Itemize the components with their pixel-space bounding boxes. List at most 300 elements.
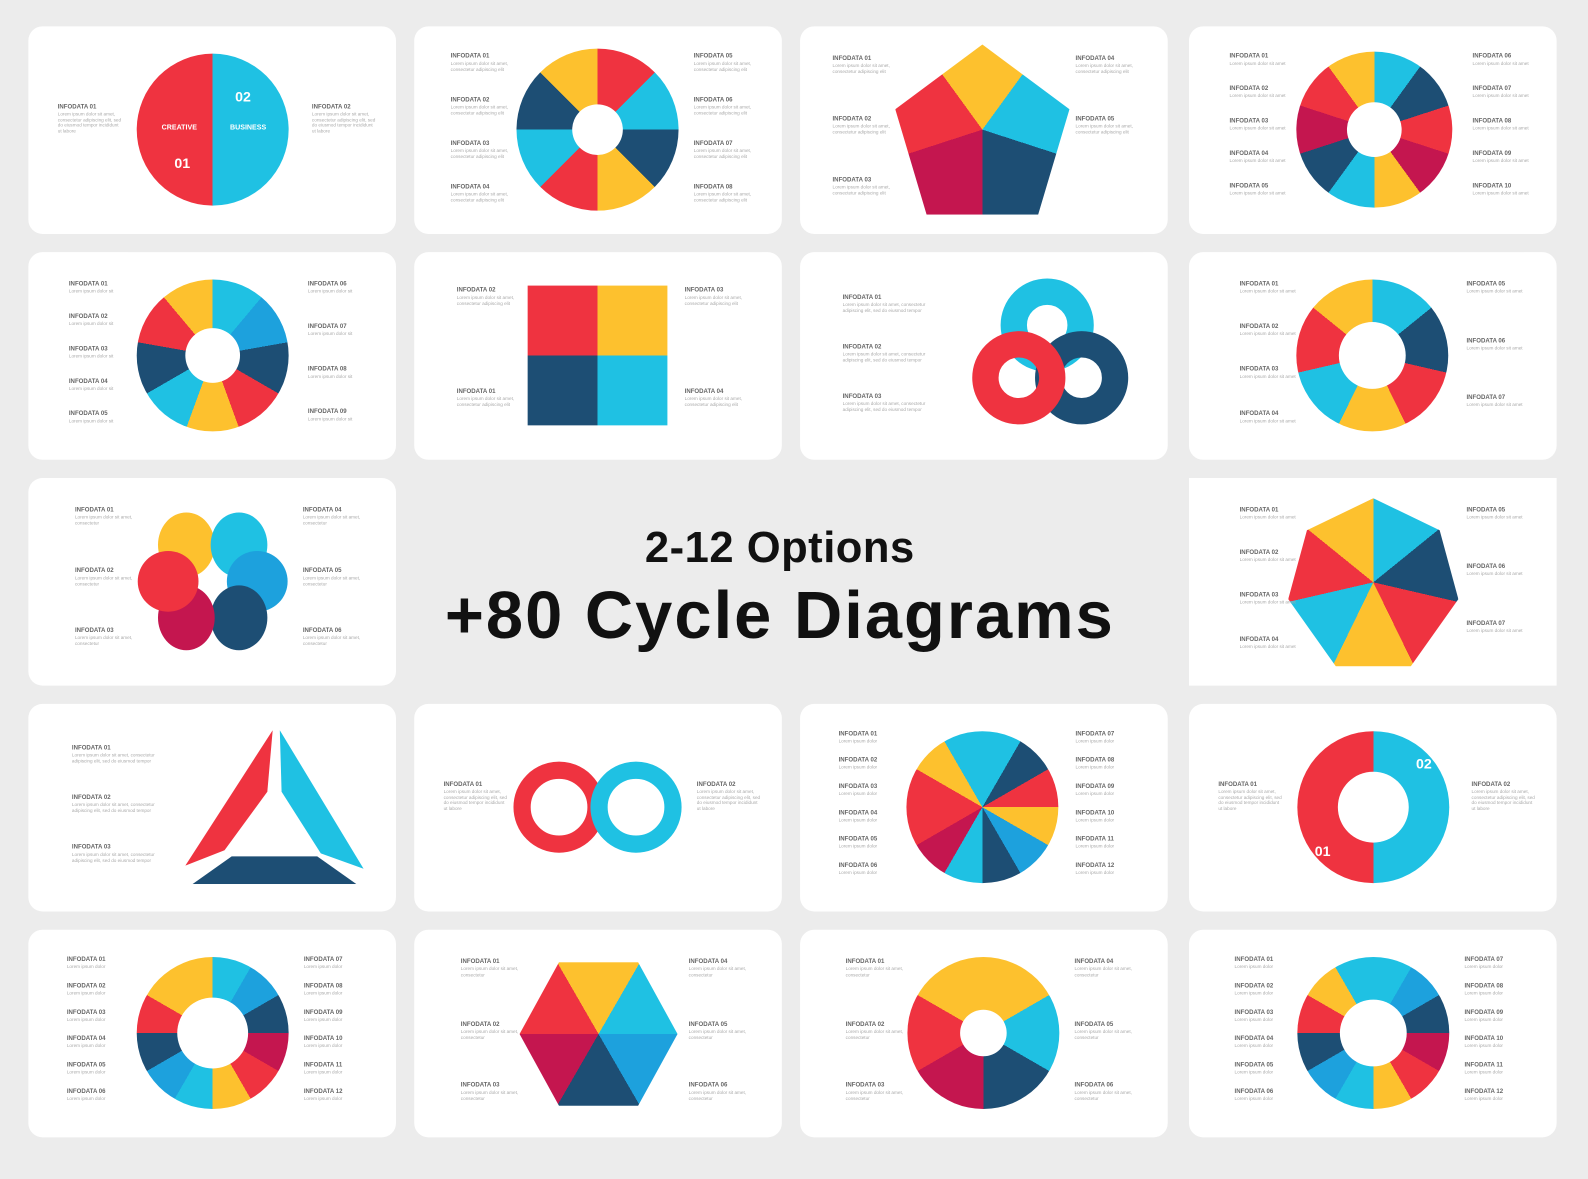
text: left labels: Lorem ipsum dolor sit xyxy=(69,386,113,391)
text: left labels xyxy=(450,53,508,202)
diagram: three rings xyxy=(972,278,1128,424)
text: labels: Lorem ipsum dolor sit amet, consectetur adipiscing elit, sed do eiusmod tempor xyxy=(72,802,155,813)
text: right labels: INFODATA 06 xyxy=(308,282,347,288)
text: right labels: INFODATA 07 xyxy=(1076,731,1114,737)
text: left labels: INFODATA 04 xyxy=(1229,151,1268,157)
diagram: 12 swirl xyxy=(906,731,1058,883)
text: left labels: Lorem ipsum dolor sit amet, consectetur xyxy=(846,1029,903,1040)
text: left labels: Lorem ipsum dolor sit amet xyxy=(1240,331,1296,336)
text: labels: Lorem ipsum dolor sit amet, consectetur adipiscing elit, sed do eiusmod tempor xyxy=(72,752,155,763)
text: left labels: INFODATA 05 xyxy=(1235,1062,1273,1068)
text: left labels: INFODATA 04 xyxy=(451,184,489,190)
text: right labels: Lorem ipsum dolor xyxy=(1464,990,1503,996)
text: right labels: Lorem ipsum dolor sit amet, consectetur xyxy=(303,635,360,646)
text: right labels xyxy=(1464,956,1503,1101)
text: left labels: INFODATA 06 xyxy=(67,1089,106,1095)
text: right labels: INFODATA 12 xyxy=(304,1089,343,1095)
text: right labels: INFODATA 06 xyxy=(303,628,342,634)
text: right labels: Lorem ipsum dolor sit xyxy=(308,289,352,294)
text: right labels: INFODATA 06 xyxy=(694,97,732,103)
text: labels: Lorem ipsum dolor sit amet, consectetur adipiscing elit, sed do eiusmod tempor xyxy=(843,351,925,362)
text: left labels: INFODATA 02 xyxy=(846,1022,884,1028)
text: labels: INFODATA 01 xyxy=(843,295,881,301)
text: right labels: INFODATA 04 xyxy=(303,507,342,513)
text: left labels: INFODATA 01 xyxy=(69,282,108,288)
text: right labels: Lorem ipsum dolor sit amet, consectetur xyxy=(689,1090,746,1100)
card 14: 2-step ring xyxy=(1189,704,1557,911)
text: left labels: INFODATA 04 xyxy=(67,1036,106,1042)
text: right labels: INFODATA 04 xyxy=(685,389,723,395)
text: left labels: Lorem ipsum dolor sit amet, consectetur adipiscing elit xyxy=(457,396,514,407)
text: labels: INFODATA 03 xyxy=(843,394,881,400)
text: right labels xyxy=(1472,53,1529,196)
text: left labels: Lorem ipsum dolor sit amet xyxy=(1229,190,1286,195)
diagram: infinity rings xyxy=(513,762,682,853)
text: right labels: INFODATA 08 xyxy=(694,184,732,190)
text: left labels: Lorem ipsum dolor xyxy=(839,844,877,849)
text: left labels: INFODATA 03 xyxy=(1240,592,1278,599)
text: right labels: INFODATA 07 xyxy=(304,957,343,963)
text: right labels: INFODATA 05 xyxy=(303,568,342,574)
text: right labels: Lorem ipsum dolor sit amet xyxy=(1473,61,1529,66)
text: left labels: Lorem ipsum dolor sit amet xyxy=(1240,418,1296,423)
diagram: swirl xyxy=(907,957,1059,1109)
text: right labels: Lorem ipsum dolor xyxy=(1076,765,1114,770)
text: right labels: Lorem ipsum dolor xyxy=(1464,1069,1503,1075)
text: right labels xyxy=(684,287,742,407)
text: right labels: Lorem ipsum dolor xyxy=(304,1017,342,1022)
text: labels: INFODATA 02 xyxy=(72,795,111,801)
text: left labels: INFODATA 01 xyxy=(1229,54,1268,60)
text: right labels: Lorem ipsum dolor sit amet, consectetur adipiscing elit xyxy=(694,61,751,71)
text: left labels: INFODATA 01 xyxy=(1240,282,1278,288)
text: right labels: Lorem ipsum dolor sit amet xyxy=(1466,571,1523,576)
text: right labels: INFODATA 05 xyxy=(1466,282,1505,288)
text: left labels: INFODATA 01 xyxy=(846,959,884,965)
text: left labels: Lorem ipsum dolor sit amet xyxy=(1240,374,1296,379)
text: right labels: Lorem ipsum dolor xyxy=(304,990,342,996)
text: left labels: INFODATA 01 xyxy=(1235,957,1273,963)
text: left labels xyxy=(839,731,878,875)
text: infodata 02: Lorem ipsum dolor sit amet, consectetur adipiscing elit, sed do eiusmod tempor incididunt ut labore xyxy=(1472,789,1535,811)
card 7: 3 rings xyxy=(800,252,1168,460)
text: right labels: Lorem ipsum dolor sit amet xyxy=(1466,628,1523,633)
card 15: 12 segments ring xyxy=(28,930,396,1137)
text: left labels: INFODATA 03 xyxy=(1235,1010,1273,1016)
text: left labels xyxy=(1234,956,1274,1101)
text: right labels: Lorem ipsum dolor sit amet xyxy=(1473,190,1529,195)
text: right labels: Lorem ipsum dolor sit amet, consectetur xyxy=(689,966,746,977)
diagram: puzzle circle: 01 xyxy=(174,155,190,171)
text: left labels: INFODATA 02 xyxy=(1229,86,1268,92)
text: labels: INFODATA 02 xyxy=(843,344,881,350)
text: left labels xyxy=(1229,53,1286,196)
text: left labels: Lorem ipsum dolor sit xyxy=(69,321,113,326)
text: right labels: INFODATA 12 xyxy=(1076,863,1114,869)
text: right labels: INFODATA 08 xyxy=(308,367,347,373)
text: infodata 02: INFODATA 02 xyxy=(312,104,351,110)
text: left labels: Lorem ipsum dolor sit amet, consectetur xyxy=(461,1029,518,1040)
text: left labels: INFODATA 04 xyxy=(69,379,108,385)
text: left labels: INFODATA 03 xyxy=(461,1083,500,1089)
text: left labels: INFODATA 04 xyxy=(839,810,877,816)
text: left labels: INFODATA 03 xyxy=(67,1010,106,1016)
text: left labels xyxy=(69,281,114,424)
text: right labels: Lorem ipsum dolor sit xyxy=(308,374,352,379)
text: left labels: INFODATA 04 xyxy=(1240,637,1278,643)
card 16: hexagon xyxy=(414,930,782,1137)
text: left labels: INFODATA 02 xyxy=(69,314,108,320)
card 12: infinity xyxy=(414,704,782,911)
card 4: 10 segments xyxy=(1189,26,1557,234)
text: left labels xyxy=(1240,281,1296,424)
text: left labels: INFODATA 02 xyxy=(1240,324,1278,330)
text: right labels: Lorem ipsum dolor sit amet xyxy=(1466,345,1523,350)
text: left labels: INFODATA 01 xyxy=(457,389,495,395)
text: right labels: Lorem ipsum dolor sit amet, consectetur xyxy=(1075,1090,1132,1100)
text: left labels: Lorem ipsum dolor xyxy=(839,870,877,875)
text: labels xyxy=(72,745,155,863)
diagram: puzzle circle: BUSINESS xyxy=(230,125,266,132)
text: right labels: INFODATA 10 xyxy=(1076,810,1114,816)
text: left labels: Lorem ipsum dolor xyxy=(839,791,877,796)
text: left labels: Lorem ipsum dolor sit amet, consectetur adipiscing elit xyxy=(451,148,508,159)
text: right labels: INFODATA 09 xyxy=(304,1010,343,1016)
diagram: 12 segment ring xyxy=(137,957,289,1109)
text: right labels: INFODATA 07 xyxy=(1466,395,1505,401)
diagram: hexagon xyxy=(520,962,678,1106)
text: infodata 02: INFODATA 02 xyxy=(1472,782,1510,788)
text: left labels: Lorem ipsum dolor xyxy=(839,765,877,770)
text: left labels: INFODATA 01 xyxy=(67,957,106,963)
text: labels xyxy=(842,294,926,412)
text: left labels: Lorem ipsum dolor sit amet, consectetur adipiscing elit xyxy=(451,191,508,202)
text: right labels: Lorem ipsum dolor xyxy=(1076,844,1114,849)
title block xyxy=(445,524,1115,652)
text: left labels: Lorem ipsum dolor sit amet xyxy=(1240,600,1296,605)
text: right labels: INFODATA 09 xyxy=(308,409,347,415)
text: right labels: INFODATA 06 xyxy=(1466,338,1505,344)
text: left labels: Lorem ipsum dolor sit amet xyxy=(1240,289,1296,294)
text: right labels xyxy=(1466,281,1523,407)
card 18: 12 segment ring xyxy=(1189,930,1557,1137)
text: right labels: INFODATA 08 xyxy=(1464,983,1503,989)
text: right labels: Lorem ipsum dolor sit amet xyxy=(1473,158,1529,163)
text: infodata 01: INFODATA 01 xyxy=(58,104,96,110)
text: left labels: INFODATA 01 xyxy=(461,959,500,965)
text: right labels: INFODATA 04 xyxy=(1076,56,1114,62)
text: left labels: INFODATA 02 xyxy=(1240,550,1278,556)
text: left labels: Lorem ipsum dolor sit amet, consectetur adipiscing elit xyxy=(832,184,890,195)
text: right labels xyxy=(1076,731,1114,875)
text: right labels: INFODATA 03 xyxy=(685,288,723,294)
text: right labels: Lorem ipsum dolor sit xyxy=(308,416,352,421)
diagram: flower petals xyxy=(138,512,288,650)
text: right labels xyxy=(1074,958,1132,1100)
text: right labels: INFODATA 06 xyxy=(1466,564,1505,570)
diagram: square pinwheel xyxy=(528,286,667,425)
text: right labels: INFODATA 05 xyxy=(1466,507,1505,513)
text: left labels: INFODATA 01 xyxy=(1240,507,1278,513)
text: left labels: Lorem ipsum dolor xyxy=(67,964,105,969)
text: infodata 01: Lorem ipsum dolor sit amet, consectetur adipiscing elit, sed do eiusmod tempor incididunt ut labore xyxy=(1218,789,1282,811)
text: right labels: INFODATA 11 xyxy=(304,1062,342,1068)
text: right labels: Lorem ipsum dolor sit amet, consectetur adipiscing elit xyxy=(685,396,742,407)
text: right labels: INFODATA 08 xyxy=(304,983,343,989)
text: right labels xyxy=(1076,56,1133,134)
text: left labels: INFODATA 06 xyxy=(1235,1089,1273,1095)
card 11: triangle xyxy=(28,704,396,911)
diagram: ring xyxy=(1297,731,1449,883)
text: right labels: Lorem ipsum dolor sit xyxy=(308,331,352,336)
text: labels: INFODATA 01 xyxy=(72,745,111,751)
subtitle: 2-12 Options xyxy=(645,524,915,572)
text: infodata 02: Lorem ipsum dolor sit amet, consectetur adipiscing elit, sed do eiusmod tempor incididunt ut labore xyxy=(697,789,760,811)
card 10: heptagon xyxy=(1189,478,1557,686)
card 2: 8-swirl xyxy=(414,26,782,234)
text: right labels: Lorem ipsum dolor sit amet, consectetur xyxy=(689,1029,746,1040)
diagram: puzzle circle: 02 xyxy=(235,88,251,104)
text: right labels: Lorem ipsum dolor sit amet xyxy=(1473,126,1529,131)
text: left labels: Lorem ipsum dolor xyxy=(1235,1017,1273,1022)
text: left labels: INFODATA 04 xyxy=(1235,1036,1273,1042)
text: right labels: INFODATA 07 xyxy=(1466,621,1505,627)
text: left labels: Lorem ipsum dolor sit amet xyxy=(1229,61,1286,66)
text: left labels: Lorem ipsum dolor xyxy=(1235,1096,1273,1101)
text: right labels: Lorem ipsum dolor xyxy=(1464,1043,1503,1048)
card 1: 2-step puzzle xyxy=(28,26,396,234)
text: left labels: Lorem ipsum dolor xyxy=(1235,1069,1273,1075)
text: left labels: INFODATA 02 xyxy=(67,983,106,989)
text: left labels: INFODATA 03 xyxy=(832,177,871,183)
diagram: triangle xyxy=(186,730,364,884)
card 5: 9 segments xyxy=(28,252,396,460)
text: right labels: INFODATA 10 xyxy=(1473,183,1511,189)
text: left labels: Lorem ipsum dolor sit amet xyxy=(1229,158,1286,163)
text: right labels: INFODATA 05 xyxy=(689,1022,727,1028)
text: left labels: Lorem ipsum dolor sit xyxy=(69,418,113,423)
text: right labels: Lorem ipsum dolor sit amet, consectetur xyxy=(1075,966,1132,977)
diagram: puzzle circle xyxy=(137,54,289,206)
text: left labels xyxy=(1240,507,1296,649)
text: left labels xyxy=(461,958,518,1100)
text: right labels: Lorem ipsum dolor sit amet, consectetur adipiscing elit xyxy=(694,191,751,202)
text: right labels: INFODATA 07 xyxy=(694,141,732,147)
text: right labels: INFODATA 04 xyxy=(1075,959,1113,965)
text: left labels: INFODATA 03 xyxy=(75,628,114,634)
text: left labels: Lorem ipsum dolor xyxy=(1235,990,1273,996)
text: left labels: INFODATA 05 xyxy=(67,1062,106,1068)
text: right labels: INFODATA 05 xyxy=(1076,116,1114,123)
text: left labels: INFODATA 02 xyxy=(1235,983,1273,989)
text: right labels: INFODATA 04 xyxy=(689,959,727,965)
text: left labels xyxy=(75,507,132,646)
text: right labels: Lorem ipsum dolor xyxy=(1076,738,1114,743)
text: right labels: Lorem ipsum dolor sit amet xyxy=(1466,514,1523,520)
card 9: flower xyxy=(28,478,396,686)
diagram: pentagon xyxy=(895,45,1069,215)
text: left labels: INFODATA 06 xyxy=(839,863,877,869)
text: right labels: INFODATA 10 xyxy=(304,1036,343,1042)
text: right labels: Lorem ipsum dolor sit amet, consectetur xyxy=(1075,1029,1132,1040)
text: left labels: INFODATA 02 xyxy=(461,1022,500,1028)
text: right labels: Lorem ipsum dolor sit amet xyxy=(1466,289,1523,294)
text: left labels: Lorem ipsum dolor sit amet, consectetur xyxy=(846,966,903,977)
text: infodata 01: Lorem ipsum dolor sit amet, consectetur adipiscing elit, sed do eiusmod tempor incididunt ut labore xyxy=(444,789,507,811)
text: left labels: Lorem ipsum dolor xyxy=(67,1096,105,1101)
text: left labels: Lorem ipsum dolor sit amet xyxy=(1240,644,1296,649)
text: left labels: Lorem ipsum dolor xyxy=(839,817,877,822)
text: infodata 01: INFODATA 01 xyxy=(1218,782,1257,788)
text: infodata 02: INFODATA 02 xyxy=(697,782,736,788)
text: infodata 01: INFODATA 01 xyxy=(444,782,482,788)
text: left labels: Lorem ipsum dolor sit amet, consectetur xyxy=(461,1090,518,1100)
text: right labels xyxy=(688,958,746,1100)
text: left labels xyxy=(67,956,106,1101)
text: left labels: INFODATA 02 xyxy=(839,758,877,764)
text: left labels xyxy=(832,56,890,196)
text: right labels: INFODATA 06 xyxy=(1473,54,1511,60)
text: right labels: Lorem ipsum dolor xyxy=(304,1096,342,1101)
text: right labels: Lorem ipsum dolor sit amet xyxy=(1473,93,1529,98)
diagram: heptagon xyxy=(1288,498,1458,666)
diagram: ring: 02 xyxy=(1416,756,1432,772)
text: right labels: Lorem ipsum dolor sit amet, consectetur adipiscing elit xyxy=(694,104,751,115)
text: left labels: INFODATA 03 xyxy=(1240,367,1278,373)
text: right labels xyxy=(308,281,352,422)
text: right labels xyxy=(1466,507,1523,633)
card 6: square xyxy=(414,252,782,460)
text: right labels: Lorem ipsum dolor xyxy=(1076,817,1114,822)
card 13: 12 swirl xyxy=(800,704,1168,911)
text: left labels: INFODATA 03 xyxy=(69,346,108,352)
diagram: puzzle circle: CREATIVE xyxy=(162,125,197,132)
text: right labels: Lorem ipsum dolor sit amet, consectetur xyxy=(303,514,360,525)
text: right labels xyxy=(303,507,360,646)
text: right labels: INFODATA 06 xyxy=(689,1083,727,1089)
text: left labels: INFODATA 01 xyxy=(839,731,877,737)
text: right labels: INFODATA 08 xyxy=(1076,758,1114,764)
text: right labels: INFODATA 11 xyxy=(1076,837,1114,843)
text: left labels: INFODATA 01 xyxy=(832,56,871,62)
text: left labels: INFODATA 05 xyxy=(839,837,877,843)
text: left labels: INFODATA 02 xyxy=(451,97,489,103)
text: left labels xyxy=(846,958,903,1100)
text: left labels: Lorem ipsum dolor sit amet, consectetur xyxy=(75,635,132,646)
text: right labels: INFODATA 08 xyxy=(1473,118,1511,125)
diagram: 7 segment ring xyxy=(1296,280,1448,431)
text: left labels: Lorem ipsum dolor sit amet xyxy=(1240,514,1296,520)
text: right labels: INFODATA 10 xyxy=(1464,1036,1503,1042)
text: left labels: Lorem ipsum dolor sit amet, consectetur xyxy=(75,575,132,586)
text: left labels: Lorem ipsum dolor sit amet, consectetur adipiscing elit xyxy=(832,63,890,74)
text: right labels: Lorem ipsum dolor xyxy=(1076,870,1114,875)
text: right labels: Lorem ipsum dolor xyxy=(304,1069,342,1075)
text: left labels: INFODATA 03 xyxy=(1229,118,1268,125)
text: right labels: INFODATA 07 xyxy=(308,324,347,330)
text: right labels: Lorem ipsum dolor xyxy=(1076,791,1114,796)
text: right labels: INFODATA 05 xyxy=(1075,1022,1113,1028)
text: right labels: Lorem ipsum dolor xyxy=(304,964,342,969)
text: left labels: Lorem ipsum dolor sit amet, consectetur xyxy=(75,514,132,525)
text: labels: Lorem ipsum dolor sit amet, consectetur adipiscing elit, sed do eiusmod tempor xyxy=(843,401,925,412)
text: left labels xyxy=(457,287,514,407)
text: labels: INFODATA 03 xyxy=(72,845,111,851)
text: left labels: Lorem ipsum dolor xyxy=(67,1017,105,1022)
text: infodata 02: Lorem ipsum dolor sit amet, consectetur adipiscing elit, sed do eiusmod tempor incididunt ut labore xyxy=(312,111,375,133)
text: right labels: INFODATA 12 xyxy=(1464,1089,1503,1095)
text: left labels: INFODATA 03 xyxy=(451,141,489,147)
diagram: swirl ring xyxy=(517,49,679,211)
text: right labels: Lorem ipsum dolor sit amet, consectetur adipiscing elit xyxy=(1076,124,1133,134)
text: left labels: Lorem ipsum dolor xyxy=(1235,1043,1273,1048)
text: left labels: Lorem ipsum dolor sit xyxy=(69,353,113,359)
text: labels: Lorem ipsum dolor sit amet, consectetur adipiscing elit, sed do eiusmod tempor xyxy=(72,852,155,862)
card 17: 6 swirl xyxy=(800,930,1168,1137)
text: left labels: Lorem ipsum dolor sit amet, consectetur adipiscing elit xyxy=(832,124,890,134)
text: left labels: INFODATA 05 xyxy=(1229,183,1268,189)
text: right labels: Lorem ipsum dolor xyxy=(1464,964,1503,969)
text: left labels: Lorem ipsum dolor sit amet, consectetur adipiscing elit xyxy=(451,61,508,71)
diagram: 10 segment circle xyxy=(1296,52,1452,208)
text: left labels: Lorem ipsum dolor sit amet, consectetur xyxy=(461,966,518,977)
text: right labels: INFODATA 05 xyxy=(694,54,732,60)
text: left labels: Lorem ipsum dolor sit amet xyxy=(1240,557,1296,562)
text: left labels: Lorem ipsum dolor xyxy=(67,1043,105,1048)
text: right labels: INFODATA 11 xyxy=(1464,1062,1503,1068)
text: right labels: Lorem ipsum dolor sit amet, consectetur adipiscing elit xyxy=(685,295,742,305)
text: right labels: Lorem ipsum dolor sit amet xyxy=(1466,402,1523,407)
text: right labels: Lorem ipsum dolor sit amet, consectetur xyxy=(303,575,360,586)
text: left labels: Lorem ipsum dolor sit amet xyxy=(1229,126,1286,131)
card 3: pentagon xyxy=(800,26,1168,234)
text: left labels: Lorem ipsum dolor sit amet xyxy=(1229,93,1286,98)
text: right labels: INFODATA 09 xyxy=(1464,1010,1503,1016)
text: left labels: INFODATA 01 xyxy=(451,54,489,60)
text: right labels: INFODATA 09 xyxy=(1473,151,1511,157)
text: left labels: INFODATA 05 xyxy=(69,411,108,417)
text: right labels: INFODATA 07 xyxy=(1464,957,1503,963)
text: right labels xyxy=(694,53,751,202)
text: right labels: INFODATA 06 xyxy=(1075,1083,1113,1089)
text: left labels: INFODATA 02 xyxy=(75,568,114,574)
card 8: 7 segments xyxy=(1189,252,1557,460)
diagram: ring: 01 xyxy=(1315,843,1331,859)
text: infodata 01: Lorem ipsum dolor sit amet, consectetur adipiscing elit, sed do eiusmod tempor incididunt ut labore xyxy=(58,111,121,133)
text: left labels: Lorem ipsum dolor sit xyxy=(69,289,113,294)
text: right labels: Lorem ipsum dolor xyxy=(1464,1017,1503,1022)
text: left labels: Lorem ipsum dolor xyxy=(839,738,877,743)
text: right labels: Lorem ipsum dolor xyxy=(1464,1096,1503,1101)
text: right labels: INFODATA 07 xyxy=(1473,86,1511,92)
main title: +80 Cycle Diagrams xyxy=(445,577,1115,652)
text: left labels: INFODATA 01 xyxy=(75,507,114,513)
text: left labels: Lorem ipsum dolor sit amet, consectetur adipiscing elit xyxy=(451,104,508,115)
text: left labels: Lorem ipsum dolor sit amet, consectetur xyxy=(846,1090,903,1100)
text: left labels: Lorem ipsum dolor xyxy=(67,990,105,996)
text: right labels: INFODATA 09 xyxy=(1076,784,1114,790)
text: left labels: INFODATA 04 xyxy=(1240,411,1278,417)
text: left labels: Lorem ipsum dolor sit amet, consectetur adipiscing elit xyxy=(457,295,514,305)
text: right labels xyxy=(304,956,343,1101)
text: right labels: Lorem ipsum dolor sit amet, consectetur adipiscing elit xyxy=(694,148,751,159)
text: left labels: INFODATA 02 xyxy=(832,116,871,123)
text: labels: Lorem ipsum dolor sit amet, consectetur adipiscing elit, sed do eiusmod tempor xyxy=(843,302,925,313)
diagram: 12 segment ring xyxy=(1297,957,1449,1109)
text: left labels: INFODATA 02 xyxy=(457,288,495,294)
diagram: 9 segment ring xyxy=(137,280,289,431)
text: left labels: INFODATA 03 xyxy=(846,1083,884,1089)
